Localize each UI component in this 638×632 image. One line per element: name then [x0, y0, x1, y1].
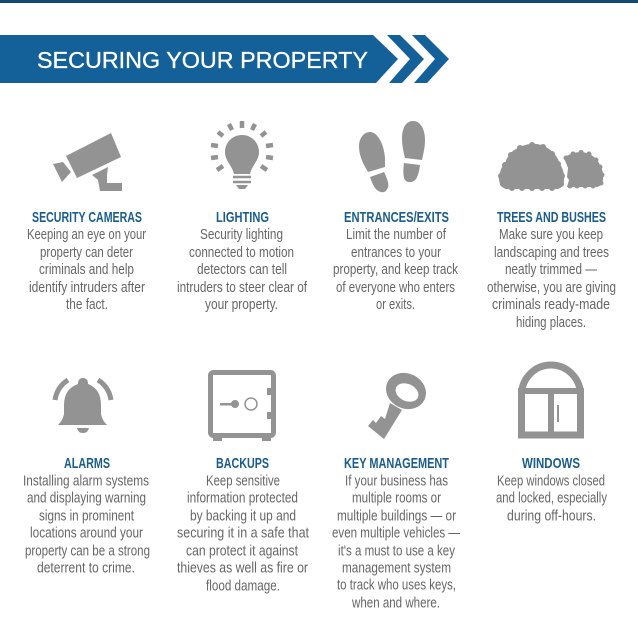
body text: [23, 472, 150, 576]
body text: entrances to your: [351, 244, 441, 261]
panel: security cameras: [27, 133, 146, 313]
icon: safe: [210, 372, 274, 441]
body text: Installing alarm systems: [23, 472, 149, 490]
icon: key: [368, 366, 432, 439]
body text: can protect it against: [186, 542, 299, 560]
panel: lighting: [177, 121, 308, 313]
body text: [177, 472, 310, 594]
body text: Security lighting: [200, 226, 283, 243]
body text: [177, 226, 308, 313]
heading: KEY MANAGEMENT: [344, 455, 449, 472]
body text: or exits.: [376, 296, 415, 313]
top rule: [0, 0, 638, 3]
banner chevrons: [387, 35, 449, 83]
body text: and displaying warning: [27, 490, 146, 506]
body text: criminals ready-made: [492, 296, 610, 313]
banner arrow shape: [0, 35, 398, 83]
heading: SECURITY CAMERAS: [32, 209, 142, 226]
body text: [496, 472, 607, 524]
body text: property can deter: [40, 244, 133, 261]
body text: property can be a strong: [25, 542, 150, 560]
body text: during off-hours.: [507, 508, 596, 524]
body text: landscaping and trees: [494, 244, 609, 261]
body text: signs in prominent: [39, 508, 135, 524]
heading: ENTRANCES/EXITS: [344, 209, 449, 226]
icon: light bulb: [211, 121, 273, 189]
body text: management system: [342, 560, 451, 576]
body text: hiding places.: [516, 314, 586, 331]
body text: If your business has: [345, 472, 448, 490]
body text: Limit the number of: [346, 226, 447, 243]
body text: of everyone who enters: [336, 279, 455, 296]
body text: [487, 226, 616, 331]
panel: windows: [496, 365, 607, 524]
body text: deterrent to crime.: [37, 560, 135, 576]
heading: BACKUPS: [216, 455, 269, 472]
title: SECURING YOUR PROPERTY: [37, 47, 368, 73]
body text: identify intruders after: [29, 279, 145, 296]
panel: entrances and exits: [333, 121, 458, 313]
body text: thieves as well as fire or: [177, 560, 308, 576]
panel: key management: [332, 366, 460, 612]
body text: [27, 226, 146, 313]
panel: backups: [177, 372, 310, 594]
icon: window: [518, 365, 584, 436]
icon: security camera: [53, 133, 122, 191]
body text: multiple rooms or: [352, 490, 441, 506]
heading: LIGHTING: [216, 209, 269, 226]
icon: bell: [55, 378, 111, 433]
heading: ALARMS: [64, 455, 110, 472]
body text: even multiple vehicles —: [332, 524, 460, 542]
body text: criminals and help: [39, 261, 134, 278]
body text: connected to motion: [189, 244, 294, 261]
body text: Keep sensitive: [206, 472, 280, 490]
body text: the fact.: [66, 296, 108, 313]
body text: to track who uses keys,: [337, 576, 456, 594]
body text: Make sure you keep: [499, 226, 603, 243]
body text: neatly trimmed —: [505, 261, 597, 278]
body text: securing it in a safe that: [177, 524, 310, 542]
body text: detectors can tell: [197, 261, 287, 278]
body text: [333, 226, 458, 313]
body text: it's a must to use a key: [338, 542, 455, 560]
body text: Keep windows closed: [497, 472, 605, 490]
icon: bushes: [498, 142, 604, 191]
body text: by backing it up and: [190, 508, 296, 524]
heading: WINDOWS: [522, 455, 580, 472]
body text: Keeping an eye on your: [27, 226, 146, 243]
panel: trees and bushes: [487, 142, 616, 331]
panel: alarms: [23, 378, 150, 576]
body text: locations around your: [30, 524, 143, 542]
body text: flood damage.: [206, 578, 280, 594]
body text: property, and keep track: [333, 261, 458, 278]
body text: intruders to steer clear of: [177, 279, 308, 296]
icon: footprints: [359, 121, 425, 192]
body text: [332, 472, 460, 612]
body text: multiple buildings — or: [337, 508, 456, 524]
body text: when and where.: [351, 594, 440, 612]
body text: information protected: [187, 490, 298, 506]
title banner: [0, 35, 449, 83]
body text: your property.: [205, 296, 278, 313]
